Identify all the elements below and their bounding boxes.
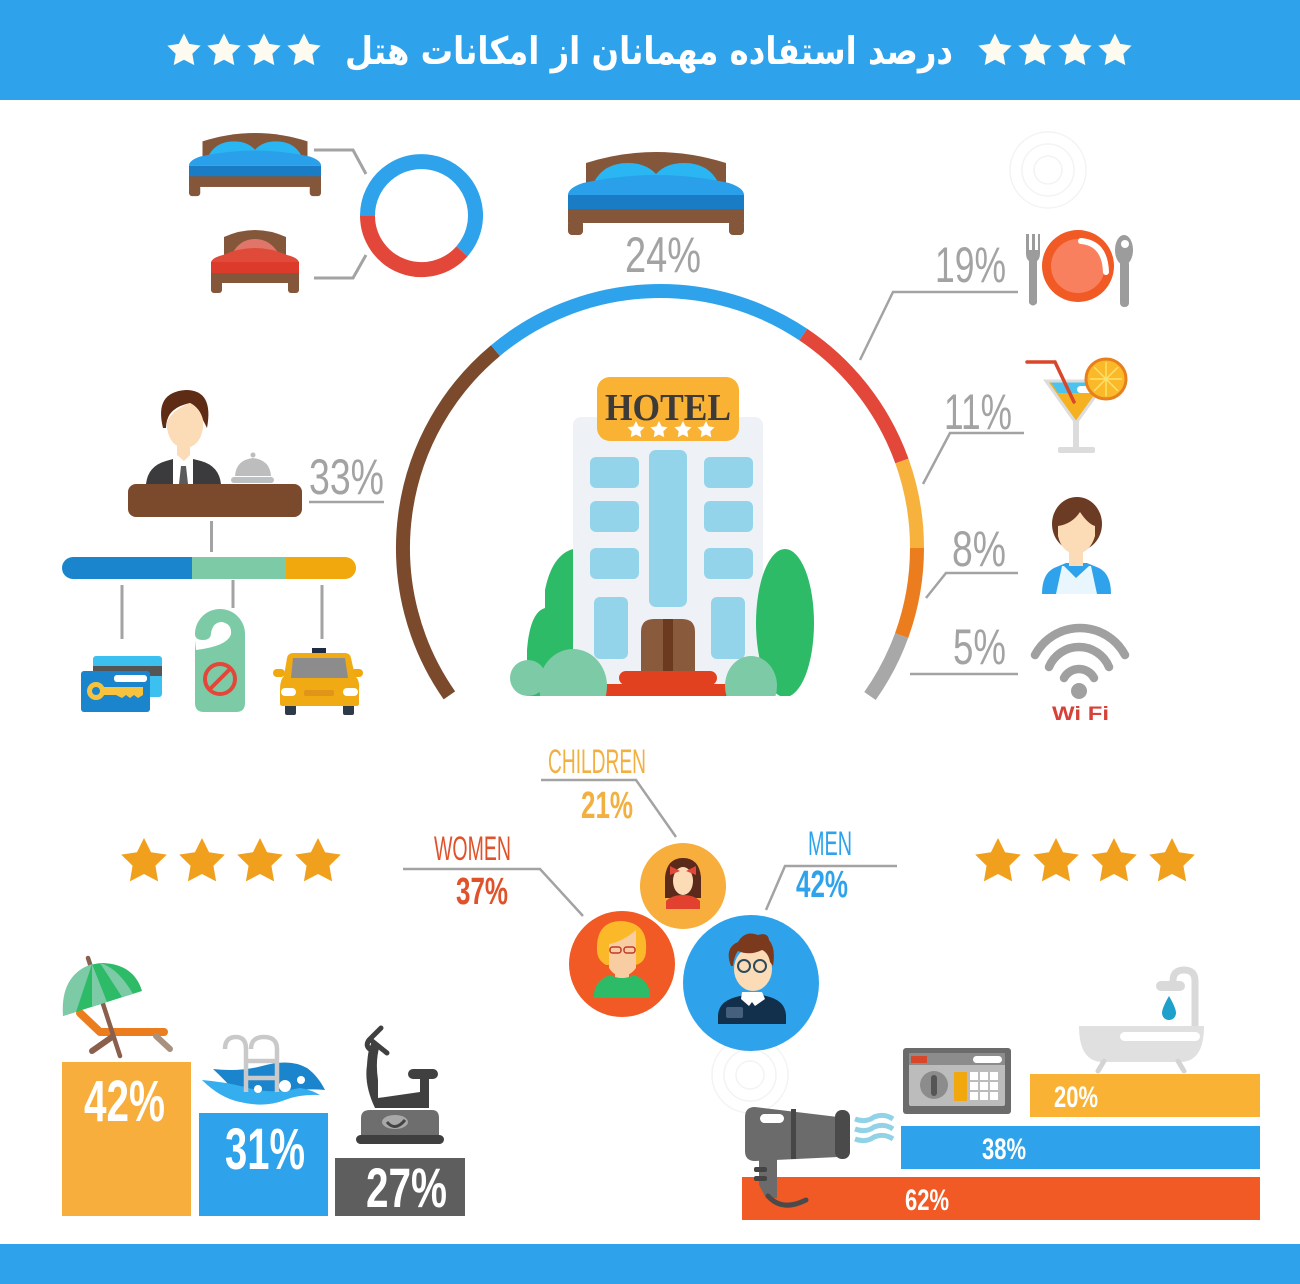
icon: bathtub with shower <box>1079 970 1204 1071</box>
icon: hotel building <box>510 377 814 723</box>
stars left <box>121 838 341 881</box>
icon: do not disturb door hanger <box>195 609 245 712</box>
label: 33%: 33% <box>309 449 384 505</box>
label: 11% with leader <box>923 384 1024 484</box>
icon: beach umbrella and lounger <box>63 958 170 1056</box>
bar: 20%: 20% <box>1054 1081 1098 1114</box>
label: children: 21% <box>581 785 633 827</box>
connector lines <box>122 521 322 639</box>
banner stars right <box>978 34 1132 65</box>
icon: air waves <box>855 1115 893 1141</box>
bar: 62%: 62% <box>905 1184 949 1217</box>
label: children: CHILDREN <box>548 743 646 781</box>
banner stars left <box>167 34 321 65</box>
circle: woman <box>569 911 675 1017</box>
bar: 27%: 27% <box>366 1156 447 1219</box>
reception desk <box>128 484 302 517</box>
circle: man <box>683 915 819 1051</box>
icon: double bed small <box>189 133 321 196</box>
label: 8% with leader <box>926 521 1018 598</box>
label: women <box>403 830 583 916</box>
icon: swimming pool <box>202 1037 325 1105</box>
label: men: 42% <box>796 864 848 906</box>
label: 5% with leader: 5% <box>953 619 1006 675</box>
icon: safe <box>903 1048 1011 1114</box>
bar: 42% <box>62 1062 191 1216</box>
bar: 38%: 38% <box>982 1133 1026 1166</box>
label: women: WOMEN <box>434 830 511 868</box>
segmented reception bar <box>62 557 356 579</box>
icon: housekeeper <box>1042 497 1111 594</box>
icon: single bed red <box>211 230 299 293</box>
icon: service bell <box>231 452 274 483</box>
label: men: MEN <box>808 825 852 863</box>
icon: key card <box>81 656 162 712</box>
arc chart <box>403 291 917 696</box>
icon: large double bed <box>568 152 744 235</box>
label: 8% with leader: 8% <box>952 521 1006 577</box>
banner title: درصد استفاده مهمانان از امکانات هتل <box>345 29 953 73</box>
label: 24%: 24% <box>625 227 701 283</box>
bottom banner <box>0 1244 1300 1284</box>
icon: cocktail <box>1027 359 1126 453</box>
bar: 42%: 42% <box>84 1069 165 1134</box>
label: children <box>541 743 676 837</box>
icon: hair dryer <box>745 1107 850 1205</box>
icon: wifi <box>1035 628 1125 725</box>
label: 19% with leader: 19% <box>935 237 1006 293</box>
bar: 20% <box>1030 1074 1260 1117</box>
icon: receptionist <box>146 390 221 484</box>
stars right <box>975 838 1195 881</box>
icon: wifi: Wi Fi <box>1052 704 1109 725</box>
icon: dining plate <box>1026 230 1133 307</box>
hotel sign <box>597 377 739 441</box>
hotel sign: HOTEL <box>605 387 731 429</box>
top banner <box>0 0 1300 100</box>
label: 5% with leader <box>910 619 1018 675</box>
bar: 27% <box>335 1156 465 1219</box>
bar: 38% <box>901 1126 1260 1169</box>
bar: 62% <box>742 1177 1260 1220</box>
label: women: 37% <box>456 871 508 913</box>
donut chart: bed types <box>367 162 475 270</box>
bar: 31% <box>199 1113 328 1216</box>
circle: child <box>640 843 726 929</box>
icon: taxi <box>273 648 363 715</box>
bed connector lines <box>314 150 366 278</box>
bar: 31%: 31% <box>225 1117 305 1182</box>
label: 11% with leader: 11% <box>944 384 1012 440</box>
label: men <box>766 825 897 910</box>
label: 19% with leader <box>860 237 1018 360</box>
icon: exercise bike <box>356 1028 444 1144</box>
